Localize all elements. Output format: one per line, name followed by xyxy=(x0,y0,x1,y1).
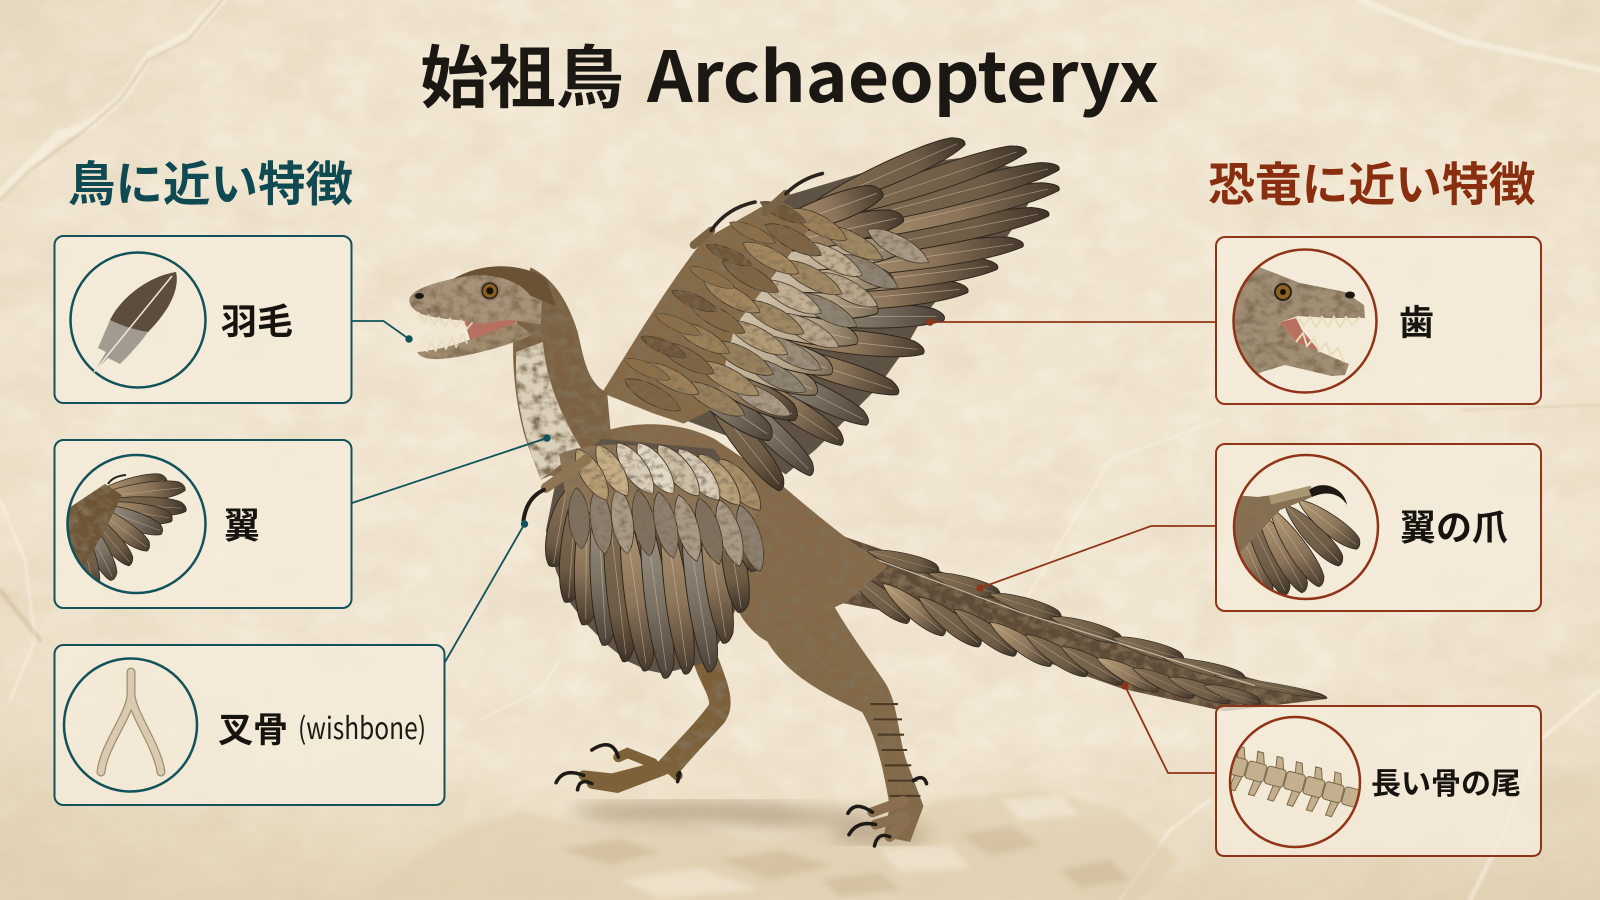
torso xyxy=(546,424,888,647)
panel: wing claw xyxy=(1216,444,1541,611)
left leg and foot xyxy=(556,658,731,790)
head xyxy=(409,266,556,359)
coverts xyxy=(620,196,933,424)
title xyxy=(420,22,1159,123)
circle: dinosaur head icon xyxy=(1232,250,1376,392)
circle: wing claw icon xyxy=(1225,455,1378,604)
connector: long bony tail xyxy=(1122,683,1216,773)
label: long bony tail: 長い骨の尾 xyxy=(1371,759,1521,803)
panel: feather xyxy=(54,236,352,403)
lower wing xyxy=(541,436,771,680)
ground patches xyxy=(360,790,1180,900)
eye xyxy=(480,281,500,301)
label: wishbone: (wishbone) xyxy=(298,704,426,748)
panel: wishbone xyxy=(54,645,444,805)
label: feather: 羽毛 xyxy=(221,293,293,345)
label: wishbone xyxy=(218,702,426,753)
panel: teeth xyxy=(1216,237,1541,404)
ground shadow under the bird xyxy=(570,803,930,842)
circle: feather icon xyxy=(70,252,206,388)
circle: tail vertebrae icon xyxy=(1221,717,1367,847)
mouth interior xyxy=(464,316,522,344)
connector: wing xyxy=(352,435,550,503)
connector: feather xyxy=(352,321,412,342)
hand claw xyxy=(523,459,587,520)
upper wing xyxy=(602,130,1062,497)
heading: dinosaur-like features: 恐竜に近い特徴 xyxy=(1208,148,1536,215)
skull xyxy=(409,267,543,324)
wing silhouette xyxy=(602,158,1036,474)
nostril xyxy=(415,293,424,299)
lower jaw xyxy=(417,322,533,359)
secondary feathers xyxy=(662,179,906,449)
circle: wing icon xyxy=(66,455,206,593)
connector: wishbone xyxy=(445,521,527,662)
panel: wing xyxy=(54,440,352,608)
lower wing silhouette xyxy=(546,439,755,673)
circle: wishbone icon xyxy=(64,658,197,792)
lower wing coverts xyxy=(566,436,771,575)
label: teeth: 歯 xyxy=(1399,295,1434,346)
lower wing flight feathers xyxy=(541,488,766,680)
right leg and foot xyxy=(755,602,927,846)
label: wishbone: 叉骨 xyxy=(218,702,288,753)
title: Archaeopteryx xyxy=(646,22,1159,123)
panel: long bony tail xyxy=(1216,706,1541,856)
illustration: Archaeopteryx xyxy=(409,130,1328,846)
tail xyxy=(827,531,1328,711)
primary feathers xyxy=(691,130,1062,497)
connector: teeth xyxy=(927,319,1216,325)
neck xyxy=(513,267,612,480)
label: wing: 翼 xyxy=(224,497,260,549)
heading: bird-like features: 鳥に近い特徴 xyxy=(68,146,353,215)
title: 始祖鳥 xyxy=(420,23,624,122)
wing claws xyxy=(694,173,822,245)
connector: wing claw xyxy=(977,526,1216,591)
label: wing claw: 翼の爪 xyxy=(1400,499,1508,551)
arm base xyxy=(602,199,816,423)
